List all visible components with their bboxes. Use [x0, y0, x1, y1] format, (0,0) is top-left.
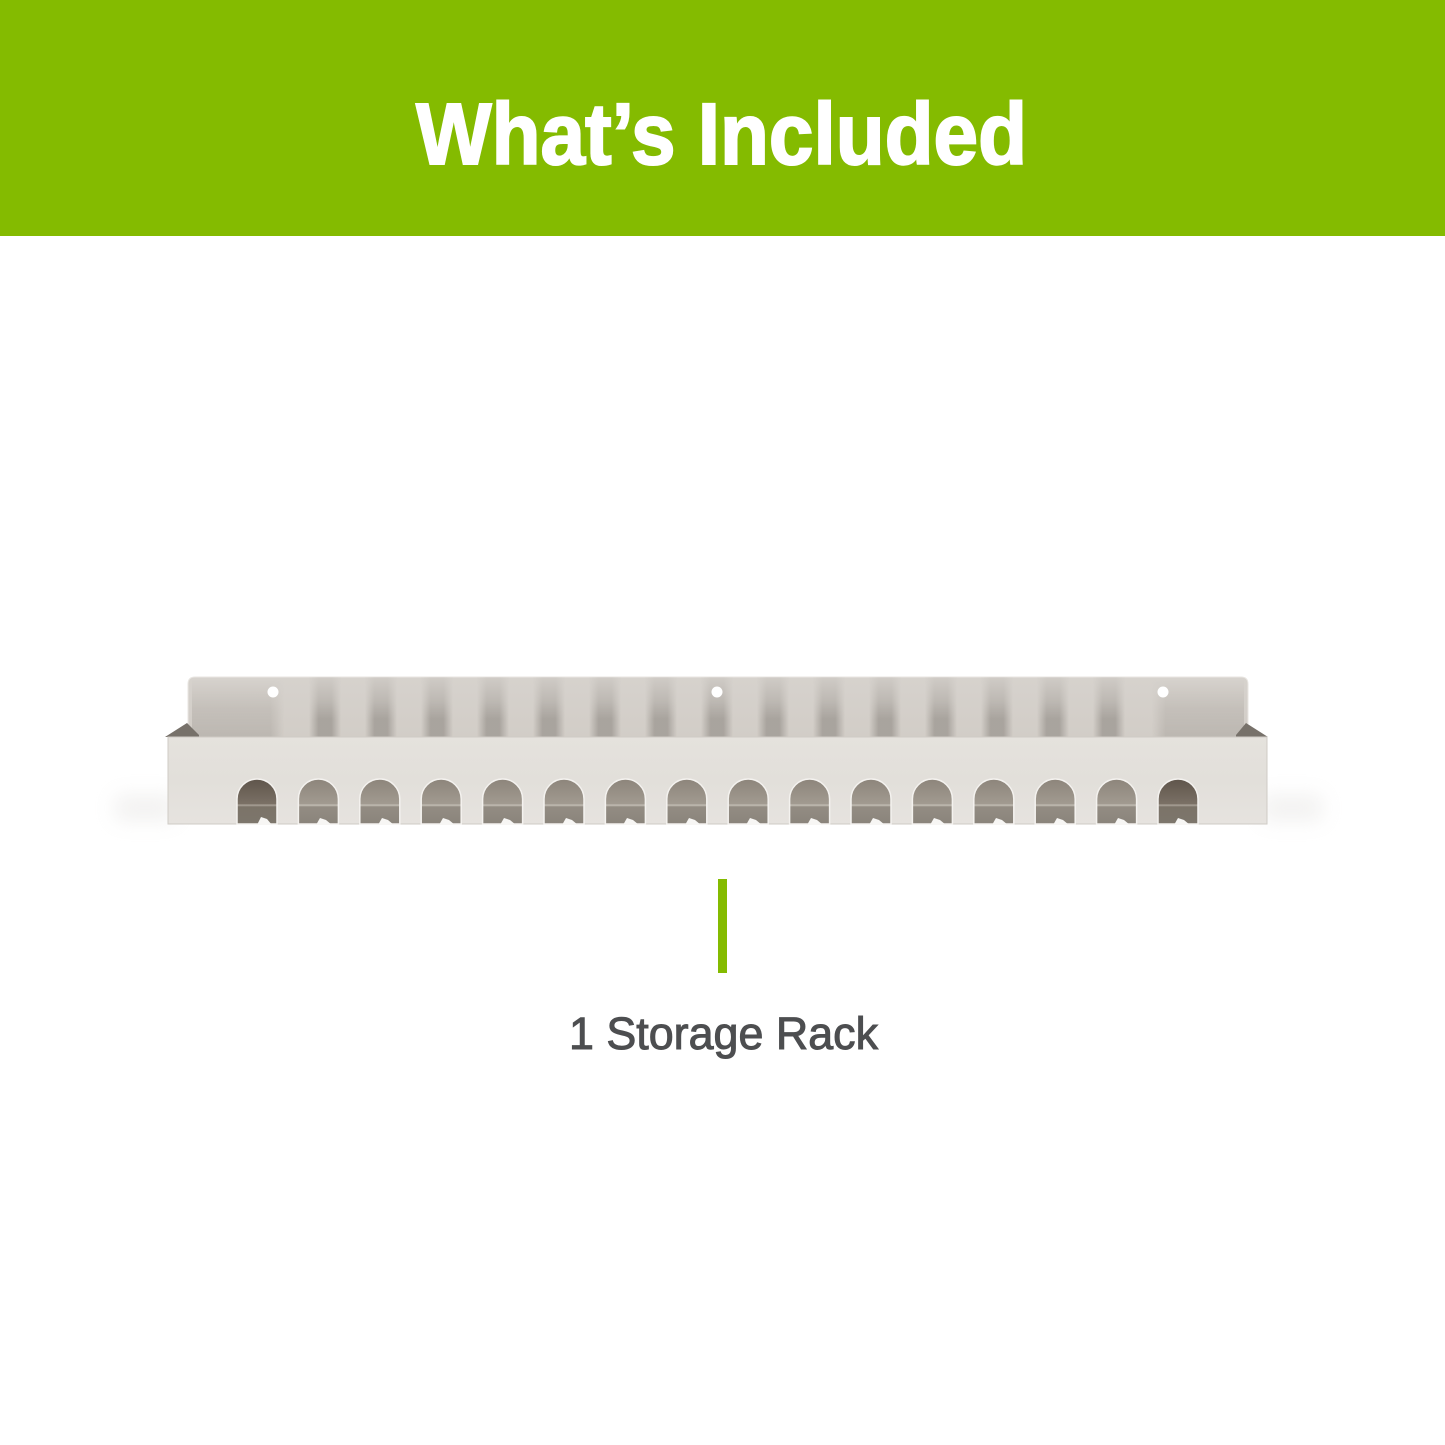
- slot bottom notches: [257, 817, 1190, 825]
- label: 1 Storage Rack: 1 Storage Rack: [569, 1008, 878, 1059]
- green connector line: [718, 879, 727, 973]
- title: What’s Included: [416, 86, 1027, 183]
- soft shadow: [115, 795, 1322, 821]
- rack slots: [237, 779, 1198, 824]
- rack side corners: [165, 723, 1268, 737]
- storage rack product image: [115, 677, 1322, 825]
- header banner: [0, 0, 1445, 236]
- rack back plate: [188, 677, 1248, 737]
- mounting holes: [268, 686, 1168, 698]
- rack front plate: [168, 737, 1267, 824]
